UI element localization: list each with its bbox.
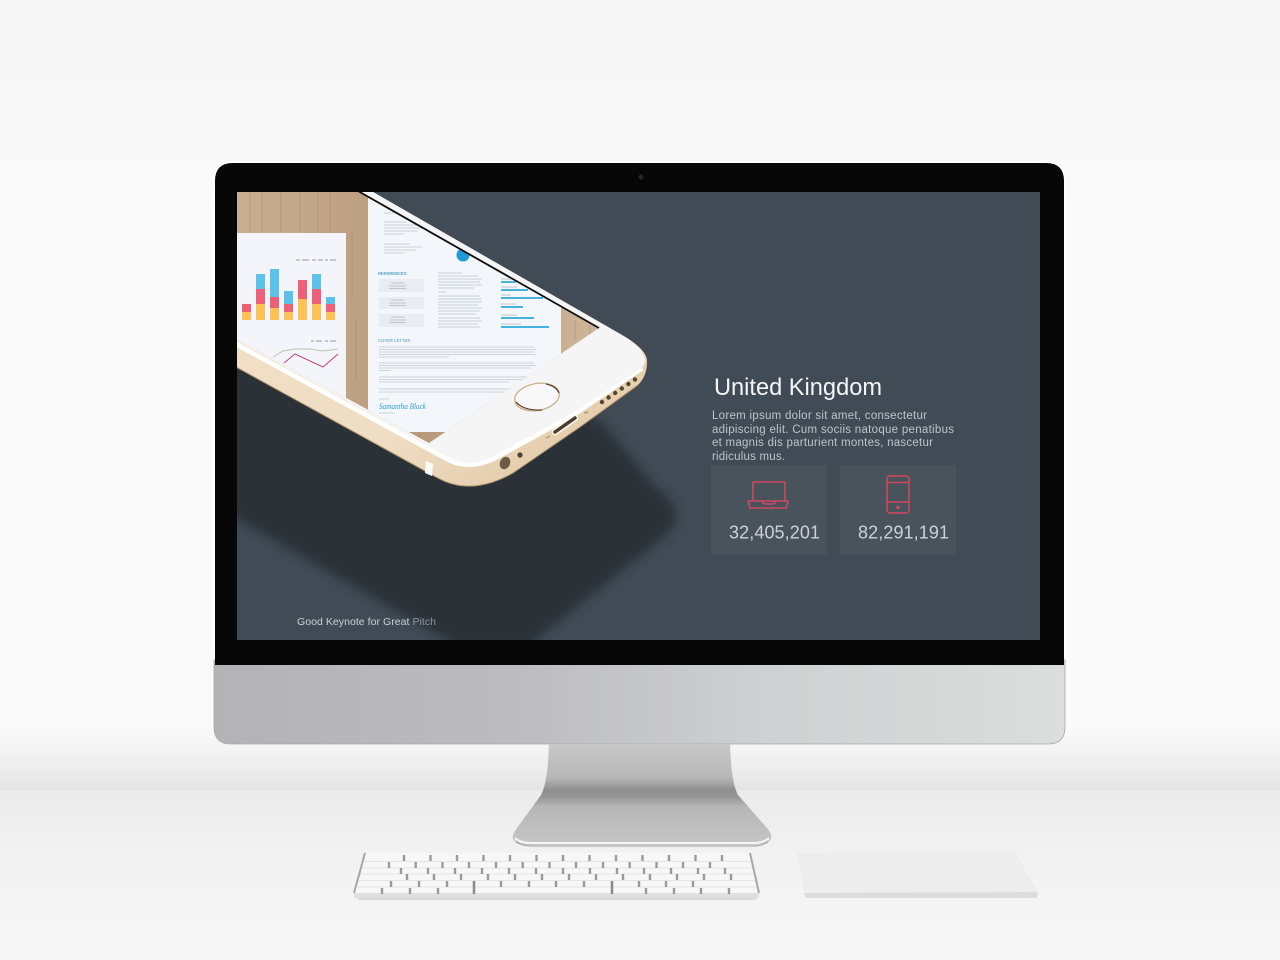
screen (225, 191, 1040, 648)
screen background (237, 192, 1040, 640)
stat card: mobile (840, 465, 956, 555)
stand rim (515, 838, 769, 843)
signature name (379, 412, 394, 414)
blue badge (456, 248, 470, 262)
port outline (555, 418, 575, 432)
phone dark edge (236, 367, 638, 486)
stat card: laptop (711, 465, 827, 555)
keyboard body (354, 853, 759, 893)
trackpad (797, 852, 1038, 898)
cover letter text (379, 347, 536, 399)
key rows (357, 862, 757, 887)
card background (711, 465, 827, 555)
line chart (273, 349, 338, 367)
wood grain (250, 192, 590, 443)
references heading: REFERENCES (378, 271, 407, 276)
trackpad front edge (804, 892, 1038, 898)
left paper (237, 233, 346, 398)
icon: phone (887, 476, 909, 513)
resume upper text (384, 213, 422, 253)
phone (236, 191, 647, 486)
icon: laptop (748, 482, 788, 508)
stand lower edge (516, 842, 768, 846)
body text: et magnis dis parturient montes, nascetur (712, 437, 933, 449)
keyboard side edges (354, 853, 759, 893)
screw right (584, 412, 588, 413)
keyboard front edge (354, 893, 759, 898)
home button (514, 382, 560, 412)
body text (712, 410, 954, 463)
phone white face (236, 192, 645, 463)
monitor (213, 161, 1066, 744)
wood surface (236, 192, 606, 447)
monitor halo (213, 161, 1066, 671)
body text: ridiculus mus. (712, 451, 785, 463)
monitor bezel (215, 163, 1064, 665)
mobile count: 82,291,191 (858, 522, 949, 542)
signature: Samantha Black (379, 402, 426, 411)
keyboard shadow (358, 895, 756, 900)
title: United Kingdom (714, 374, 882, 401)
footer caption: Good Keynote for Great Pitch (297, 616, 436, 628)
monitor stand (513, 744, 771, 846)
keyboard (354, 853, 759, 900)
microphone (517, 452, 523, 458)
card background (840, 465, 956, 555)
laptop count: 32,405,201 (729, 522, 820, 542)
resume middle text (438, 273, 482, 327)
skill labels (501, 279, 521, 324)
lightning port (555, 418, 575, 432)
monitor chin (214, 660, 1065, 744)
phone display contents (236, 192, 606, 453)
trackpad surface (797, 852, 1038, 893)
antenna band (425, 461, 433, 476)
camera (638, 174, 644, 180)
space bar gaps (474, 881, 612, 894)
port opening (555, 418, 575, 432)
skill bars (501, 282, 549, 327)
phone top edge line (358, 191, 599, 328)
stand body (513, 744, 771, 845)
phone white rim (236, 344, 642, 465)
home ring dark arc (516, 384, 559, 410)
phone shadow (237, 368, 678, 640)
home ring (514, 382, 560, 412)
resume paper (368, 192, 561, 432)
phone gold body (236, 192, 647, 486)
cover letter heading: COVER LETTER (378, 338, 410, 343)
chart legend (296, 260, 336, 341)
body text: Lorem ipsum dolor sit amet, consectetur (712, 410, 927, 422)
desk surface (0, 790, 1280, 960)
bar chart (242, 269, 335, 320)
body text: adipiscing elit. Cum sociis natoque penatibus (712, 424, 954, 436)
speaker holes (600, 377, 637, 404)
key gaps (382, 855, 731, 894)
reference cards (379, 279, 424, 327)
headphone jack (500, 456, 510, 470)
screw (546, 436, 550, 438)
